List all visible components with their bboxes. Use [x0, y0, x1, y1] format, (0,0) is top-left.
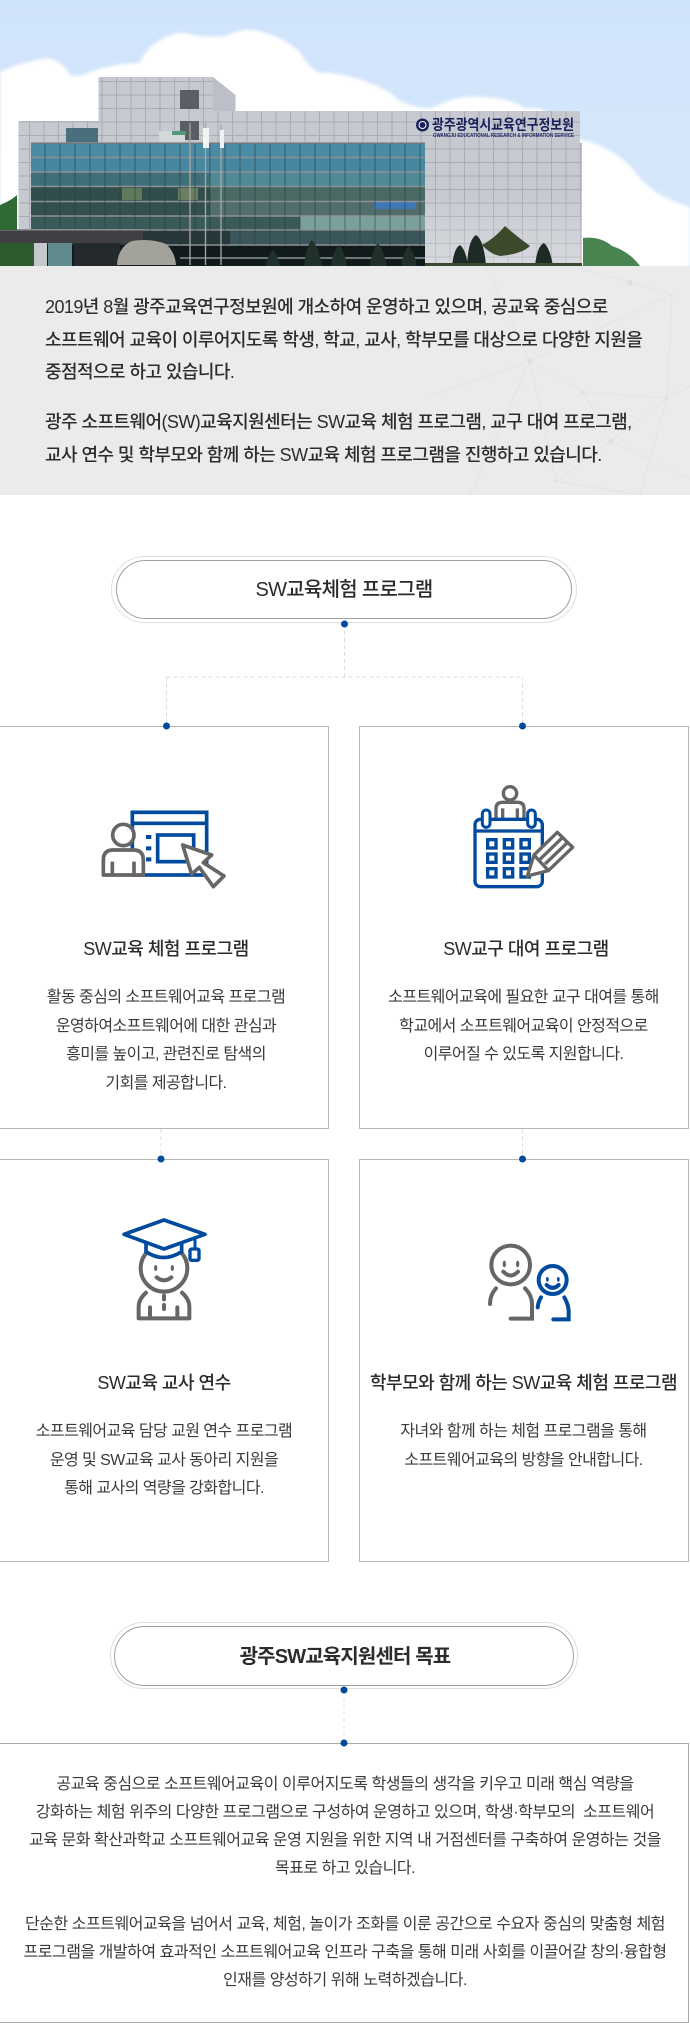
intro paragraph 2: 광주 소프트웨어(SW)교육지원센터는 SW교육 체험 프로그램, 교구 대여 프로그램, — [45, 412, 632, 432]
card body: 운영 및 SW교육 교사 동아리 지원을 — [50, 1452, 278, 1468]
pill label: 광주SW교육지원센터 목표 — [240, 1646, 450, 1668]
building sign: GWANGJU EDUCATIONAL RESEARCH & INFORMATION SERVICE — [433, 133, 574, 139]
card title: 학부모와 함께 하는 SW교육 체험 프로그램 — [370, 1373, 677, 1393]
card body: 이루어질 수 있도록 지원합니다. — [424, 1046, 623, 1063]
goal paragraph 2: 인재를 양성하기 위해 노력하겠습니다. — [223, 1972, 467, 1989]
intro panel with network background — [0, 266, 690, 495]
goal paragraph 1: 공교육 중심으로 소프트웨어교육이 이루어지도록 학생들의 생각을 키우고 미래 핵심 역량을 — [56, 1776, 634, 1793]
clouds — [0, 30, 690, 267]
goal text box — [0, 1743, 689, 2023]
hero photo: education research institute building — [0, 0, 690, 266]
card: SW교구 대여 프로그램 — [359, 726, 689, 1129]
card body: 기회를 제공합니다. — [105, 1074, 227, 1092]
card body: 소프트웨어교육에 필요한 교구 대여를 통해 — [388, 989, 659, 1006]
icon: calendar with person and pencil — [473, 785, 574, 888]
heading pill: SW교육체험 프로그램 — [111, 556, 577, 623]
building — [18, 77, 582, 266]
card body — [400, 1422, 647, 1468]
card: SW교육 교사 연수 — [0, 1159, 329, 1562]
icon: teacher with graduation cap — [122, 1218, 207, 1320]
icon: person at screen with cursor — [102, 810, 226, 889]
connectors between card rows — [158, 1129, 526, 1162]
goal paragraph 1: 교육 문화 확산과학교 소프트웨어교육 운영 지원을 위한 지역 내 거점센터를 구축하여 운영하는 것을 — [29, 1832, 661, 1849]
pill label: SW교육체험 프로그램 — [255, 579, 433, 601]
intro paragraph 1 — [45, 297, 642, 382]
building sign: 광주광역시교육연구정보원 — [432, 117, 574, 134]
intro paragraph 1: 2019년 8월 광주교육연구정보원에 개소하여 운영하고 있으며, 공교육 중심으로 — [45, 297, 608, 317]
card body — [36, 1422, 292, 1497]
goal paragraph 1: 목표로 하고 있습니다. — [275, 1860, 415, 1877]
card body — [388, 988, 659, 1063]
card body: 활동 중심의 소프트웨어교육 프로그램 — [47, 989, 285, 1006]
card: 학부모와 함께 하는 SW교육 체험 프로그램 — [359, 1159, 689, 1562]
card body — [47, 988, 285, 1092]
connector lines from heading to cards — [163, 620, 526, 730]
card body: 학교에서 소프트웨어교육이 안정적으로 — [399, 1018, 648, 1034]
card body: 통해 교사의 역량을 강화합니다. — [64, 1480, 264, 1497]
connector from goal heading to text box — [340, 1686, 348, 1746]
card body: 소프트웨어교육의 방향을 안내합니다. — [404, 1452, 643, 1468]
card body: 흥미를 높이고, 관련진로 탐색의 — [66, 1046, 266, 1063]
intro paragraph 2: 교사 연수 및 학부모와 함께 하는 SW교육 체험 프로그램을 진행하고 있습니다. — [45, 444, 602, 464]
icon: parent and child — [488, 1244, 571, 1322]
goal paragraph 2: 프로그램을 개발하여 효과적인 소프트웨어교육 인프라 구축을 통해 미래 사회를 이끌어갈 창의·융합형 — [23, 1944, 667, 1961]
heading pill: 광주SW교육지원센터 목표 — [110, 1622, 578, 1689]
card: SW교육 체험 프로그램 — [0, 726, 329, 1129]
goal paragraph 2: 단순한 소프트웨어교육을 넘어서 교육, 체험, 놀이가 조화를 이룬 공간으로 수요자 중심의 맞춤형 체험 — [25, 1916, 665, 1933]
intro paragraph 1: 소프트웨어 교육이 이루어지도록 학생, 학교, 교사, 학부모를 대상으로 다양한 지원을 — [45, 330, 642, 350]
card body: 운영하여소프트웨어에 대한 관심과 — [56, 1018, 276, 1034]
entrance canopy and landscaping — [0, 195, 640, 266]
building sign — [416, 117, 574, 139]
intro paragraph 1: 중점적으로 하고 있습니다. — [45, 362, 234, 382]
card body: 자녀와 함께 하는 체험 프로그램을 통해 — [400, 1423, 647, 1440]
card body: 소프트웨어교육 담당 교원 연수 프로그램 — [36, 1423, 292, 1440]
goal paragraph 1 — [29, 1776, 661, 1877]
goal paragraph 2 — [23, 1916, 667, 1989]
card title: SW교육 체험 프로그램 — [83, 939, 249, 959]
card title: SW교육 교사 연수 — [97, 1373, 231, 1393]
network pattern — [430, 266, 690, 495]
card title: SW교구 대여 프로그램 — [443, 939, 609, 959]
intro paragraph 2 — [45, 412, 632, 464]
goal paragraph 1: 강화하는 체험 위주의 다양한 프로그램으로 구성하여 운영하고 있으며, 학생·학부모의 소프트웨어 — [36, 1804, 654, 1821]
